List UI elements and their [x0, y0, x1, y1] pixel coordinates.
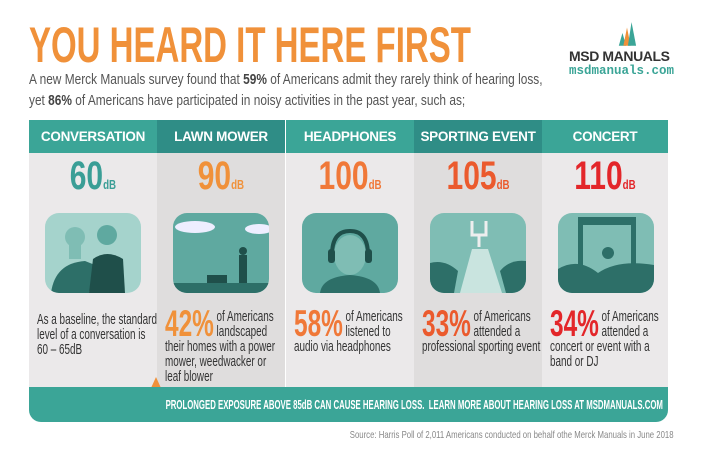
panel: headphones: 58% — [294, 303, 343, 344]
panel: lawn mower: mower, weedwacker or — [165, 353, 266, 370]
panel: conversation: level of a conversation is — [37, 326, 145, 343]
panel: headphones: listened to — [346, 323, 391, 340]
panel: concert: CONCERT — [573, 129, 637, 144]
panel: sporting event: 105dB — [446, 154, 510, 198]
icon: lawn mower — [173, 213, 269, 293]
footer banner: PROLONGED EXPOSURE ABOVE 85dB CAN CAUSE HEARING LOSS. LEARN MORE ABOUT HEARING LOSS AT MSDMANUALS.COM — [166, 397, 663, 412]
icon: orange pointer — [151, 377, 161, 388]
panel: sporting event: 33% — [422, 303, 471, 344]
panel: headphones: of Americans — [346, 308, 403, 325]
icon: stadium — [430, 213, 526, 293]
panel: conversation: As a baseline, the standard — [37, 311, 157, 328]
panel: sporting event — [414, 120, 542, 387]
panel: concert: concert or event with a — [550, 338, 650, 355]
source: Source: Harris Poll of 2,011 Americans conducted on behalf othe Merck Manuals in June 2018 — [350, 429, 674, 441]
panel: conversation — [29, 120, 157, 387]
panel: sporting event: professional sporting event — [422, 338, 540, 355]
panel: sporting event: attended a — [474, 323, 520, 340]
panel: lawn mower: LAWN MOWER — [174, 129, 268, 144]
panel: concert: attended a — [602, 323, 648, 340]
panel: headphones — [286, 120, 414, 387]
panel: headphones: 100dB — [318, 154, 382, 198]
panel: headphones: HEADPHONES — [304, 129, 396, 144]
panel: lawn mower: their homes with a power — [165, 338, 275, 355]
panel: lawn mower: 90dB — [198, 154, 244, 198]
panel: concert: of Americans — [602, 308, 659, 325]
panel: lawn mower: landscaped — [217, 323, 267, 340]
icon: concert — [558, 213, 654, 293]
panel: conversation: 60 – 65dB — [37, 341, 82, 358]
panel: lawn mower — [157, 120, 285, 387]
logo — [569, 22, 674, 78]
panel: headphones: audio via headphones — [294, 338, 391, 355]
footer banner — [29, 387, 668, 422]
panel: conversation: CONVERSATION — [41, 129, 145, 144]
panel: concert: band or DJ — [550, 353, 598, 370]
panel: concert — [542, 120, 668, 387]
panel: lawn mower: of Americans — [217, 308, 274, 325]
panel: conversation: 60dB — [70, 154, 116, 198]
logo: MSD MANUALS — [569, 48, 670, 64]
intro text: yet 86% of Americans have participated in noisy activities in the past year, such as; — [29, 93, 465, 109]
panel: sporting event: SPORTING EVENT — [420, 129, 536, 144]
panel: lawn mower: 42% — [165, 303, 214, 344]
panel: sporting event: of Americans — [474, 308, 531, 325]
panel: lawn mower: leaf blower — [165, 368, 213, 385]
icon: conversation — [45, 213, 141, 293]
intro text: A new Merck Manuals survey found that 59% of Americans admit they rarely think of hearing loss, — [29, 72, 543, 88]
title: YOU HEARD IT HERE FIRST — [29, 17, 471, 73]
panel: concert: 110dB — [574, 154, 636, 198]
panel: concert: 34% — [550, 303, 599, 344]
intro text — [29, 72, 543, 109]
logo: msdmanuals.com — [569, 64, 674, 78]
icon: headphones — [302, 213, 398, 293]
icon: logo bars — [618, 22, 636, 46]
